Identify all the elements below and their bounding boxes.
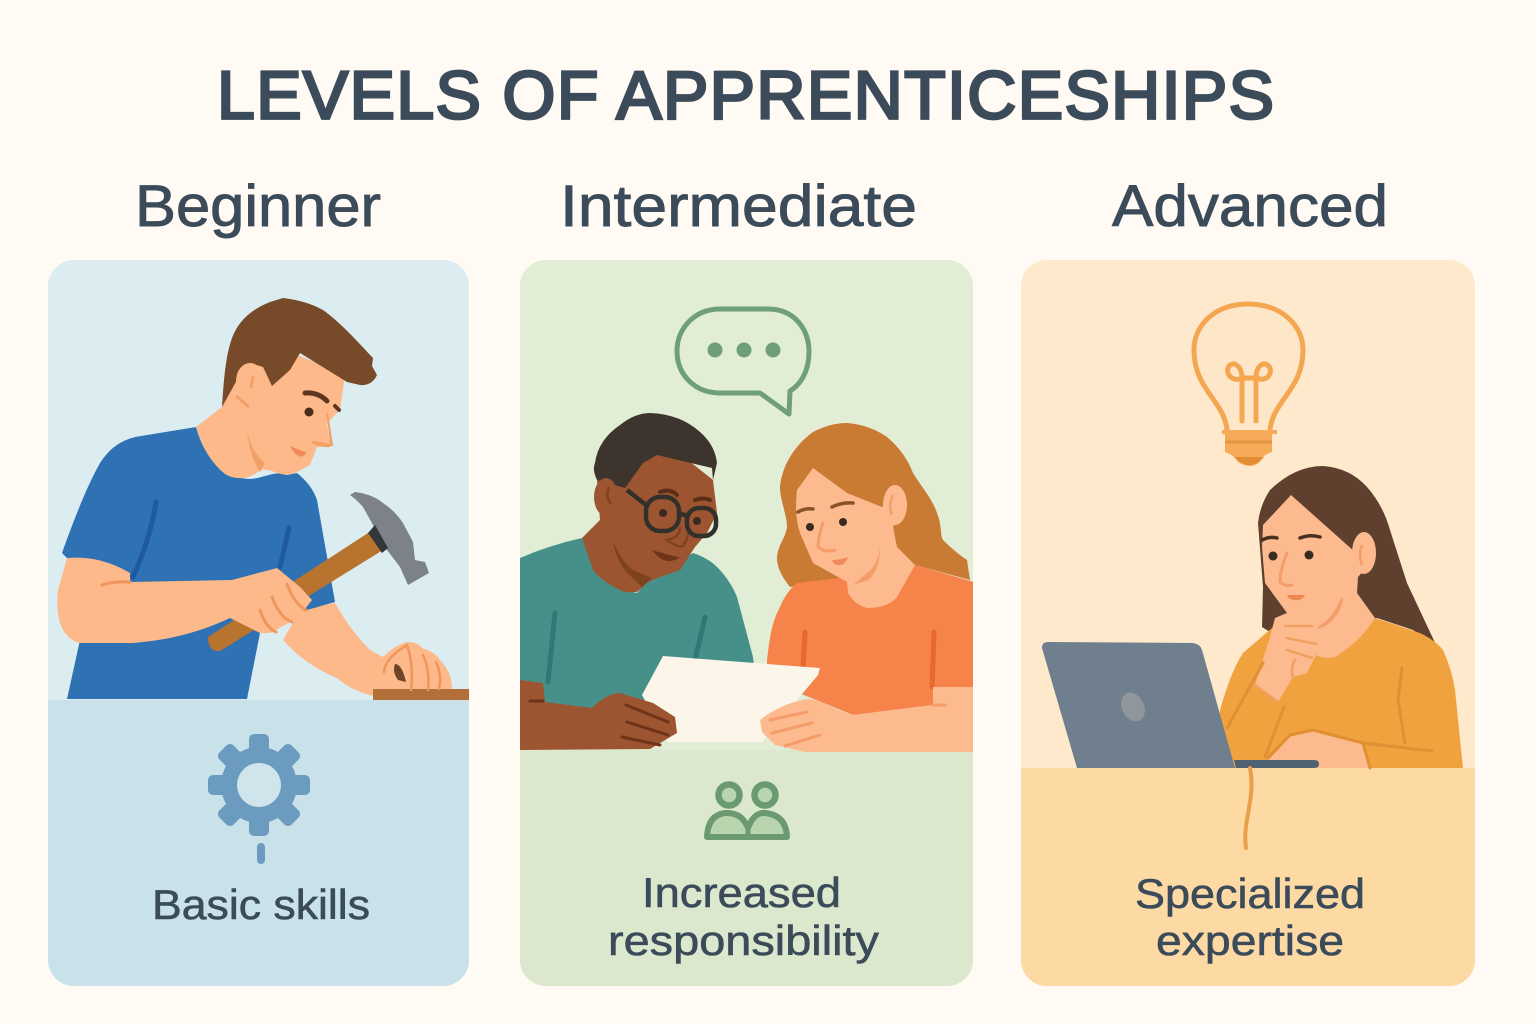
heading: Advanced: Advanced (1112, 174, 1388, 239)
heading: Beginner: Beginner (135, 174, 381, 239)
label: increased responsibility: responsibility (608, 917, 879, 964)
icon: gear (208, 734, 310, 864)
label: basic skills: Basic skills (152, 881, 370, 928)
panel: beginner (48, 260, 469, 986)
icon: speech bubble (677, 309, 809, 414)
man (520, 413, 755, 720)
label: specialized expertise: Specialized (1135, 870, 1365, 917)
man's hand (520, 680, 677, 750)
title: LEVELS OF APPRENTICESHIPS (217, 58, 1274, 134)
woman's hand (760, 687, 973, 752)
panel: intermediate (520, 260, 974, 986)
illustration: man hammering a nail (57, 298, 469, 700)
icon: group of people (707, 784, 787, 837)
label: increased responsibility: Increased (642, 869, 841, 916)
label: increased responsibility (608, 869, 879, 964)
illustration: two colleagues reviewing a document (520, 413, 974, 752)
label: specialized expertise: expertise (1156, 917, 1344, 964)
woman (767, 423, 974, 715)
icon: light bulb (1194, 304, 1303, 466)
panel: advanced (1021, 260, 1475, 986)
label: specialized expertise (1135, 870, 1365, 964)
heading: Intermediate: Intermediate (560, 174, 917, 239)
document (642, 656, 820, 742)
illustration: woman thinking at a laptop (1042, 466, 1463, 848)
